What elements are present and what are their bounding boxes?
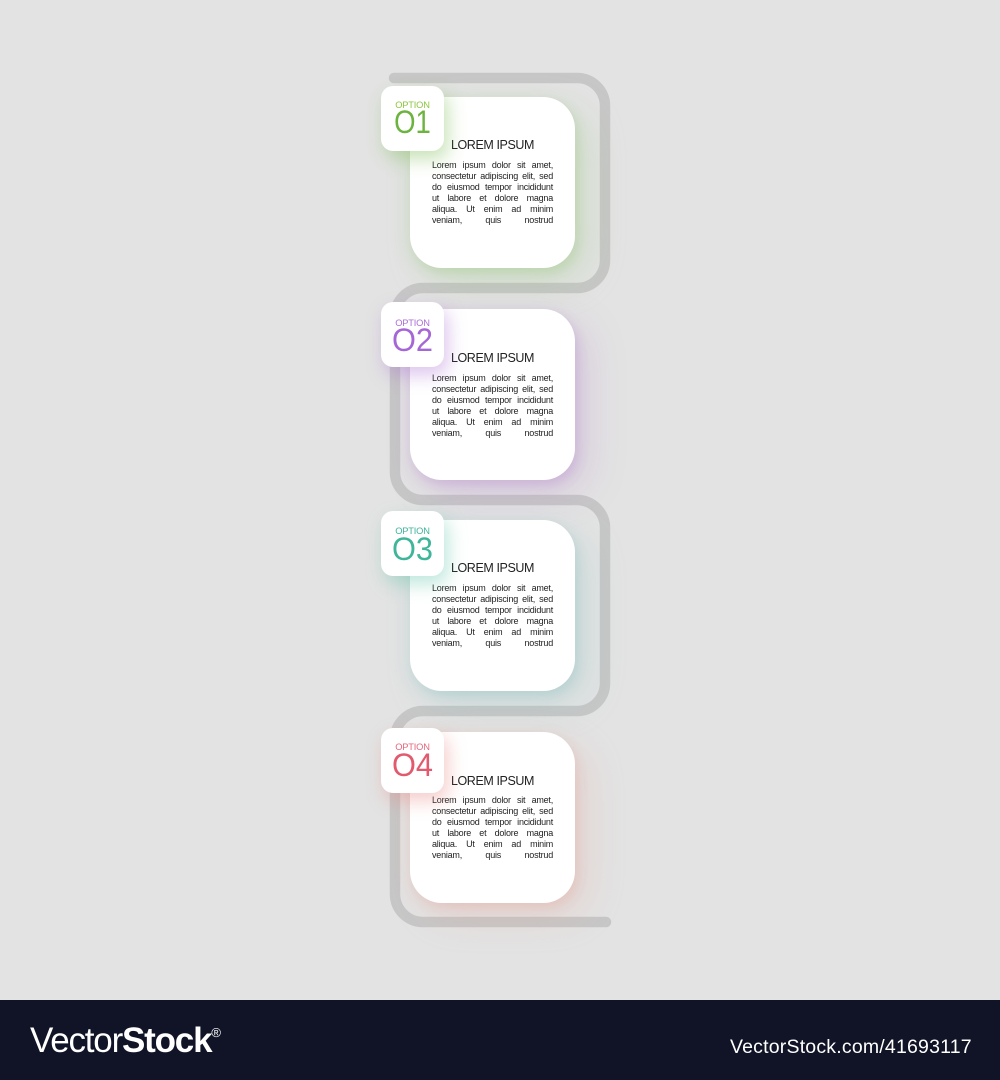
text block: option 3: consectetur adipiscing elit, sed [432,594,553,604]
badge: option 04: O4 [392,747,433,783]
text block: option 3: aliqua. Ut enim ad minim [432,627,553,637]
text block: option 1: do eiusmod tempor incididunt [432,182,553,192]
panel: option 3 card [410,520,575,691]
badge: option 02: OPTION [395,318,430,328]
badge: option 03 [381,511,444,576]
text block: option 1: ut labore et dolore magna [432,193,553,203]
text block: option 1: aliqua. Ut enim ad minim [432,204,553,214]
text block: option 3: ut labore et dolore magna [432,616,553,626]
heading: option 1: LOREM IPSUM [451,138,534,152]
footer bar [0,1000,1000,1080]
panel: option 4 card [410,732,575,903]
text block: option 1 [432,160,554,225]
text block: option 3 [432,583,554,648]
badge: option 01: O1 [394,104,431,140]
text block: option 1: veniam, quis nostrud [432,215,553,225]
text block: option 1: consectetur adipiscing elit, sed [432,171,553,181]
text block: option 3: veniam, quis nostrud [432,638,553,648]
text block: option 3: do eiusmod tempor incididunt [432,605,553,615]
badge: option 02 [381,302,444,367]
badge: option 03: OPTION [395,526,430,536]
text block: option 4 [432,795,554,860]
text block: option 4: ut labore et dolore magna [432,828,553,838]
text block: option 4: veniam, quis nostrud [432,850,553,860]
text block: option 3: Lorem ipsum dolor sit amet, [432,583,553,593]
text block: option 4: consectetur adipiscing elit, sed [432,806,553,816]
heading: option 2: LOREM IPSUM [451,351,534,365]
badge: option 02: O2 [392,322,433,358]
text block: option 2 [432,373,554,438]
text block: option 2: aliqua. Ut enim ad minim [432,417,553,427]
heading: option 3: LOREM IPSUM [451,561,534,575]
text block: option 2: do eiusmod tempor incididunt [432,395,553,405]
badge: option 03: O3 [392,531,433,567]
text block: option 4: aliqua. Ut enim ad minim [432,839,553,849]
footer logo: VectorStock® [30,1021,220,1060]
panel: option 1 card [410,97,575,268]
badge: option 01 [381,86,444,151]
text block: option 4: Lorem ipsum dolor sit amet, [432,795,553,805]
text block: option 2: veniam, quis nostrud [432,428,553,438]
heading: option 4: LOREM IPSUM [451,774,534,788]
text block: option 2: consectetur adipiscing elit, sed [432,384,553,394]
text block: option 4: do eiusmod tempor incididunt [432,817,553,827]
panel: option 2 card [410,309,575,480]
text block: option 2: ut labore et dolore magna [432,406,553,416]
text block: option 1: Lorem ipsum dolor sit amet, [432,160,553,170]
footer reference: VectorStock.com/41693117 [730,1036,972,1058]
text block: option 2: Lorem ipsum dolor sit amet, [432,373,553,383]
badge: option 04: OPTION [395,742,430,752]
badge: option 01: OPTION [395,100,430,110]
badge: option 04 [381,728,444,793]
